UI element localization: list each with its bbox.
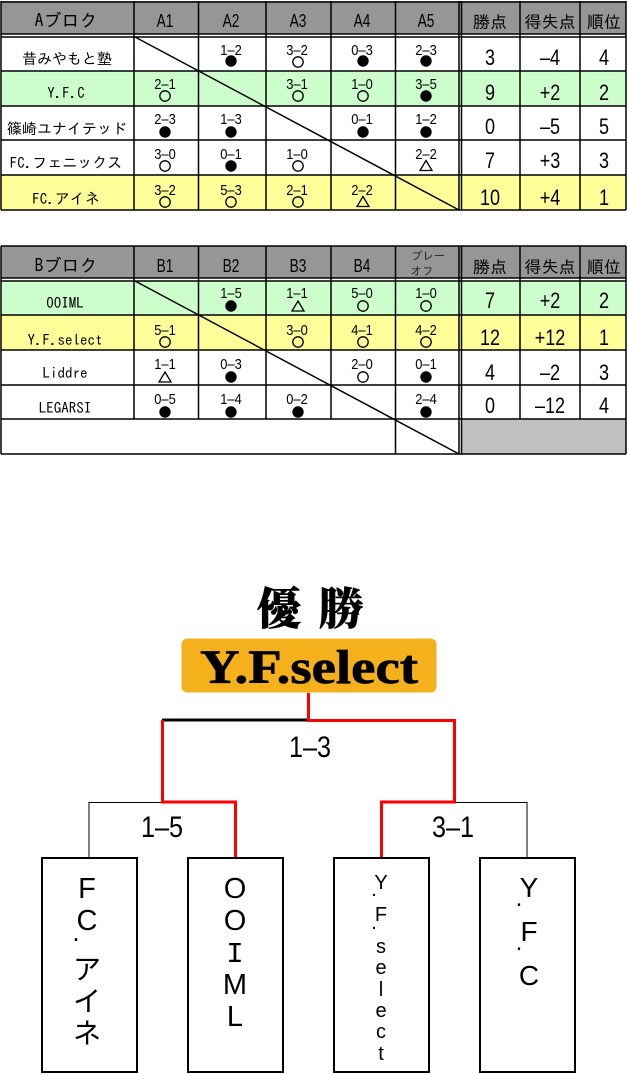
- match results: 4–2: [415, 321, 437, 338]
- team box: Y.F.select: .: [371, 879, 377, 901]
- match results: 5–3: [220, 181, 242, 198]
- team box: Y.F.select: s: [376, 936, 386, 958]
- standings numbers: –12: [535, 394, 565, 418]
- header labels: オフ: [410, 266, 434, 277]
- team box: Y.F.select: c: [376, 1021, 386, 1043]
- standings numbers: [480, 289, 609, 418]
- header labels: 勝点: [473, 13, 507, 31]
- team names: Y.F.select: [28, 332, 102, 347]
- team box: FC.アイネ: ネ: [73, 1018, 101, 1049]
- match results: 0–1: [351, 110, 373, 127]
- panel: B block league table: [1, 246, 626, 454]
- match results: 0–3: [220, 355, 242, 372]
- team box: Y.F.C: Y: [520, 872, 539, 903]
- standings numbers: +12: [535, 326, 565, 350]
- team box: Y.F.C: [480, 858, 575, 1072]
- semifinal score right: 3–1: [432, 810, 474, 843]
- team names: FC.フェニックス: [10, 155, 122, 170]
- team box: OOIML: [188, 858, 283, 1072]
- header labels: B3: [290, 256, 306, 277]
- team box: FC.アイネ: ア: [73, 954, 101, 985]
- team box: Y.F.select: l: [379, 979, 383, 1001]
- team names: FC.アイネ: [32, 191, 100, 206]
- team box: FC.アイネ: C: [77, 905, 97, 937]
- standings numbers: 0: [485, 394, 495, 418]
- team box: FC.アイネ: イ: [73, 986, 101, 1017]
- team names: 篠崎ユナイテッド: [7, 121, 127, 136]
- table grid: [1, 246, 626, 454]
- header labels: A3: [290, 11, 306, 32]
- match results: 1–2: [415, 110, 437, 127]
- team names: OOIML: [46, 295, 84, 310]
- team box: Y.F.select: t: [378, 1043, 384, 1065]
- header labels: [34, 250, 621, 277]
- header labels: A1: [157, 11, 173, 32]
- header labels: A5: [418, 11, 434, 32]
- standings numbers: 3: [485, 46, 495, 70]
- header labels: B4: [354, 256, 370, 277]
- standings numbers: 1: [599, 186, 609, 210]
- standings numbers: 4: [485, 361, 495, 385]
- team box: Y.F.select: Y: [374, 872, 388, 894]
- team box: FC.アイネ: F: [78, 873, 96, 905]
- team box: Y.F.select: e: [375, 957, 387, 979]
- header labels: プレー: [411, 250, 445, 262]
- standings numbers: 0: [485, 115, 495, 139]
- header labels: B1: [157, 256, 173, 277]
- match results: 0–3: [351, 41, 373, 58]
- standings numbers: 10: [480, 186, 500, 210]
- team box: Y.F.select: F: [375, 904, 387, 926]
- match results: 5–1: [154, 321, 176, 338]
- standings numbers: 2: [599, 289, 609, 313]
- header labels: 得失点: [524, 13, 576, 31]
- match results: 3–2: [154, 181, 176, 198]
- header labels: 順位: [587, 14, 621, 31]
- standings numbers: +3: [540, 149, 560, 173]
- team box: FC.アイネ: [42, 858, 137, 1072]
- header labels: Aブロク: [34, 11, 98, 30]
- team names: [7, 51, 127, 206]
- match results: 1–4: [220, 390, 242, 407]
- match results: 2–1: [286, 181, 308, 198]
- row fills: [1, 281, 626, 454]
- team names: Y.F.C: [47, 85, 85, 100]
- standings numbers: 4: [599, 394, 609, 418]
- match results: 1–0: [286, 145, 308, 162]
- match results: 1–5: [220, 284, 242, 301]
- match results: 2–2: [415, 145, 437, 162]
- final score: 1–3: [289, 730, 331, 763]
- header labels: Bブロク: [34, 256, 98, 275]
- team box: OOIML: O: [224, 873, 246, 905]
- match results: 1–1: [286, 284, 308, 301]
- match results: 1–1: [154, 355, 176, 372]
- panel: A block league table: [1, 1, 626, 210]
- match results: 2–3: [154, 110, 176, 127]
- match results: 3–0: [286, 321, 308, 338]
- match results: 1–0: [415, 284, 437, 301]
- header row backgrounds: [1, 1, 626, 34]
- standings numbers: 5: [599, 115, 609, 139]
- standings numbers: –4: [540, 46, 560, 70]
- standings numbers: 3: [599, 149, 609, 173]
- heading: champion: 勝: [319, 573, 363, 637]
- match results: 0–2: [286, 390, 308, 407]
- semifinal score left: 1–5: [141, 810, 183, 843]
- match results: 1–3: [220, 110, 242, 127]
- match results: 3–0: [154, 145, 176, 162]
- standings numbers: +4: [540, 186, 560, 210]
- match results: 2–3: [415, 41, 437, 58]
- match results: 3–1: [286, 75, 308, 92]
- team box: FC.アイネ: .: [72, 917, 80, 947]
- team names: LEGARSI: [39, 400, 91, 415]
- header labels: B2: [223, 256, 239, 277]
- standings numbers: –2: [540, 361, 560, 385]
- match results: 4–1: [351, 321, 373, 338]
- standings numbers: +2: [540, 289, 560, 313]
- match results: 0–5: [154, 390, 176, 407]
- team names: Liddre: [42, 365, 88, 380]
- header labels: A4: [354, 11, 370, 32]
- header labels: [34, 11, 621, 32]
- header labels: 勝点: [473, 258, 507, 276]
- match results: 2–2: [351, 181, 373, 198]
- match results: 1–0: [351, 75, 373, 92]
- header labels: A2: [223, 11, 239, 32]
- team box: Y.F.C: .: [516, 885, 522, 912]
- team box: OOIML: I: [226, 938, 244, 971]
- standings numbers: 1: [599, 326, 609, 350]
- header labels: 得失点: [524, 258, 576, 276]
- heading: champion: 優: [257, 573, 301, 637]
- team box: Y.F.select: e: [375, 1000, 387, 1022]
- standings numbers: –5: [540, 115, 560, 139]
- bracket lines: [89, 693, 527, 858]
- match results: 5–0: [351, 284, 373, 301]
- match results: 2–0: [351, 355, 373, 372]
- standings numbers: 2: [599, 81, 609, 105]
- match results: 0–1: [415, 355, 437, 372]
- standings numbers: 7: [485, 149, 495, 173]
- header row backgrounds: [1, 246, 626, 278]
- team box: OOIML: M: [223, 969, 247, 1001]
- standings numbers: 4: [599, 46, 609, 70]
- standings numbers: 3: [599, 361, 609, 385]
- team box: Y.F.select: .: [371, 912, 377, 934]
- match results: 1–2: [220, 41, 242, 58]
- match results: 0–1: [220, 145, 242, 162]
- standings numbers: 12: [480, 326, 500, 350]
- team box: Y.F.C: .: [516, 929, 522, 956]
- standings numbers: 7: [485, 289, 495, 313]
- standings numbers: +2: [540, 81, 560, 105]
- team box: OOIML: O: [224, 905, 246, 937]
- match results: 2–4: [415, 390, 437, 407]
- match results: [154, 284, 437, 418]
- team box: Y.F.select: [334, 858, 429, 1072]
- team box: Y.F.C: F: [520, 916, 538, 947]
- team box: Y.F.C: C: [519, 960, 539, 991]
- standings numbers: 9: [485, 81, 495, 105]
- team box: OOIML: L: [227, 1001, 243, 1033]
- header labels: 順位: [587, 259, 621, 276]
- match results: 3–5: [415, 75, 437, 92]
- team names: 昔みやもと塾: [22, 51, 112, 66]
- row fills: [1, 71, 626, 210]
- match results: 3–2: [286, 41, 308, 58]
- table grid: [1, 1, 626, 210]
- match results: 2–1: [154, 75, 176, 92]
- team names: [28, 295, 102, 415]
- champion name plate: Y.F.select: [200, 641, 418, 694]
- match results: [154, 41, 437, 207]
- standings numbers: [480, 46, 609, 210]
- heading: champion: [257, 573, 363, 637]
